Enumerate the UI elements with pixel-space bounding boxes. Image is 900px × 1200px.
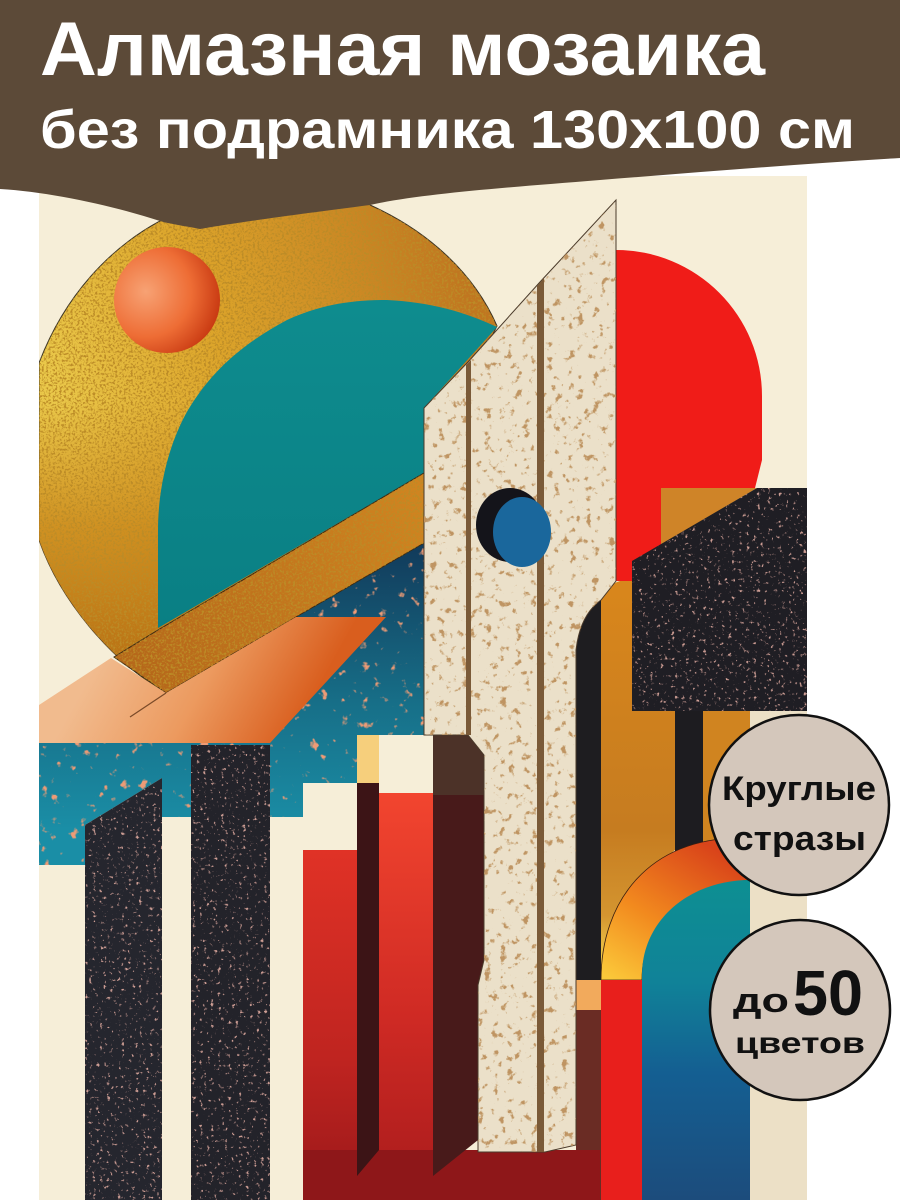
red strip	[601, 980, 642, 1200]
tower grooves	[466, 360, 471, 735]
subtitle: без подрамника 130х100 см	[40, 100, 855, 160]
badge: up to 50 colors: 50	[793, 957, 863, 1029]
red block 2	[379, 793, 433, 1150]
black hole	[476, 488, 536, 562]
badge: up to 50 colors: цветов	[735, 1027, 865, 1060]
orange rectangle behind dark block	[661, 488, 757, 545]
dark column	[675, 711, 703, 851]
teal-blue arch	[642, 880, 750, 1200]
red block 1	[303, 850, 357, 1150]
brown column	[576, 1010, 601, 1200]
cream boxes	[357, 735, 379, 783]
gold column	[703, 711, 750, 843]
teal dome	[158, 300, 497, 628]
rainbow arch	[601, 838, 750, 980]
bottom dark red	[303, 1150, 600, 1200]
blue speckled band	[39, 543, 424, 865]
header banner	[0, 0, 900, 229]
painting	[39, 176, 807, 1200]
gold tower	[601, 581, 675, 980]
peach wedge	[39, 617, 386, 743]
badge: round rhinestones: Круглые	[722, 770, 876, 808]
cream central tower	[424, 200, 616, 1152]
blue disc	[493, 497, 551, 567]
left dark tower 2	[191, 745, 270, 1200]
badge: round rhinestones: стразы	[733, 820, 866, 858]
dark block	[632, 488, 807, 711]
gold circle	[39, 189, 497, 693]
orange sphere	[114, 247, 220, 353]
title: Алмазная мозаика	[40, 7, 766, 92]
small orange box	[576, 980, 601, 1010]
gold diagonal band	[114, 473, 424, 693]
brown dark tower	[433, 795, 484, 1176]
badge: up to 50 colors	[710, 920, 890, 1100]
red semicircle	[616, 250, 762, 581]
badge: round rhinestones	[709, 715, 889, 895]
badge: up to 50 colors: до	[733, 982, 789, 1020]
left dark tower 1	[85, 778, 162, 1200]
dark strip	[576, 600, 601, 980]
right cream strip	[750, 711, 807, 1200]
dark red strip	[357, 783, 379, 1176]
